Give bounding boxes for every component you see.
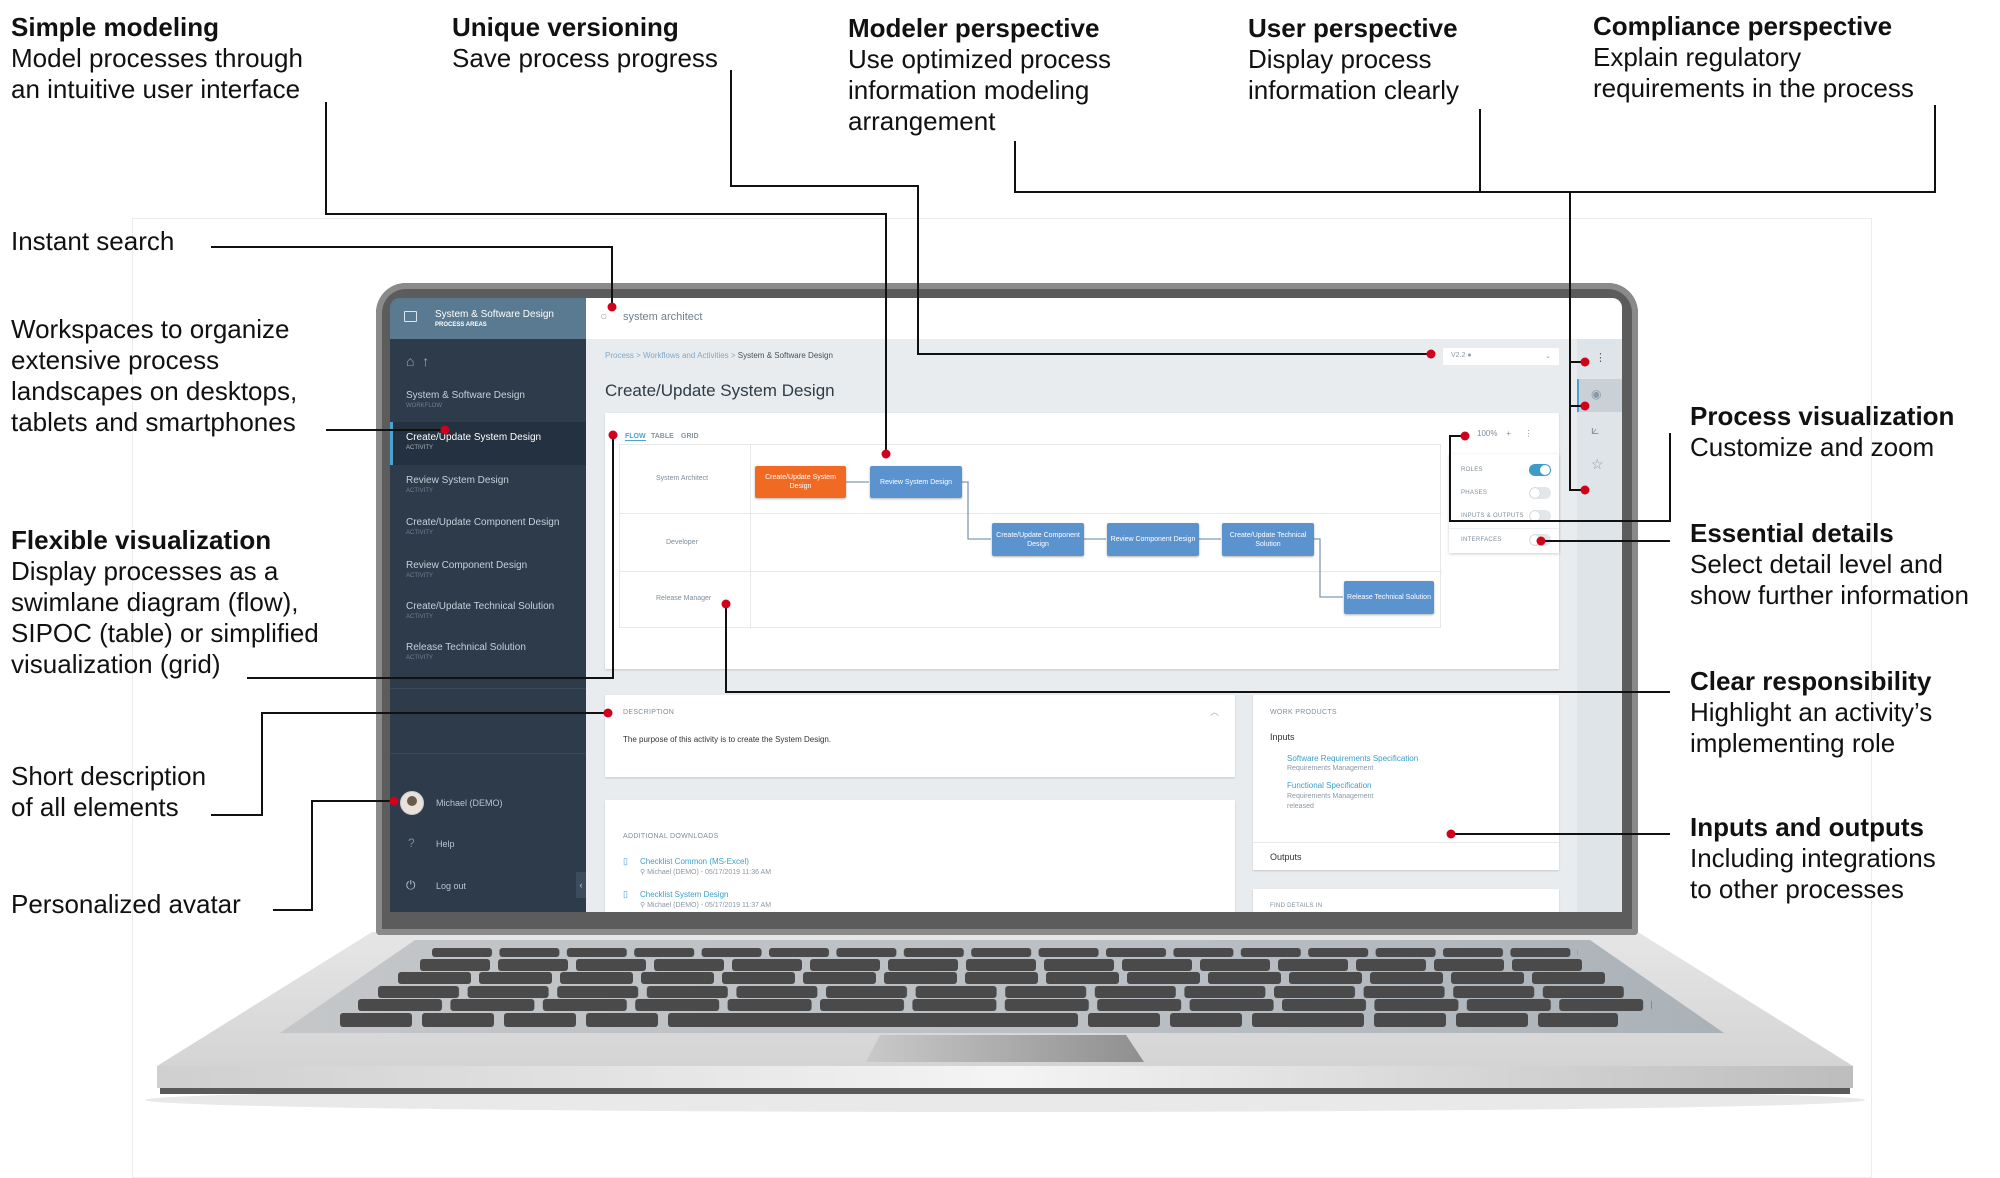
work products card: Software Requirements Specification [1287, 754, 1418, 763]
label: simple modeling: Simple modeling [11, 12, 219, 42]
version select: ⌄ [1545, 353, 1551, 360]
page title: Create/Update System Design [605, 381, 835, 400]
search bar: ○ [600, 309, 607, 323]
breadcrumb: Process > Workflows and Activities > System & Software Design [605, 351, 833, 360]
sidebar [390, 298, 586, 912]
sidebar: WORKFLOW [406, 403, 442, 409]
label: flexible visualization: Flexible visualization [11, 525, 271, 555]
right icon bar: ⟀ [1591, 421, 1599, 437]
sidebar: Create/Update System Design [406, 432, 541, 443]
label: unique versioning [452, 12, 718, 73]
sidebar: Release Technical Solution [406, 642, 526, 653]
label: essential details [1690, 518, 1969, 610]
swimlanes [619, 444, 1441, 628]
label: modeler perspective: Modeler perspective [848, 13, 1099, 43]
label: simple modeling [11, 12, 303, 104]
label: clear responsibility: implementing role [1690, 728, 1895, 758]
label: workspaces: landscapes on desktops, [11, 376, 297, 406]
label: essential details: Essential details [1690, 518, 1894, 548]
label: inputs and outputs: Including integrations [1690, 843, 1936, 873]
screen [390, 298, 1622, 912]
flow card: 100% + ⋮ [1477, 429, 1532, 438]
right icon bar: ⋮ [1595, 352, 1606, 364]
sidebar: ⏻ [406, 878, 416, 892]
label: process visualization [1690, 401, 1954, 462]
search bar: system architect [623, 311, 702, 323]
search bar [586, 298, 1622, 339]
description card [605, 695, 1235, 777]
downloads card: ADDITIONAL DOWNLOADS [623, 833, 719, 840]
sidebar: Create/Update Component Design [406, 517, 559, 528]
flow card: Design [790, 483, 811, 490]
label: essential details: show further information [1690, 580, 1969, 610]
downloads card: ⚲ Michael (DEMO) - 05/17/2019 11:36 AM [640, 869, 771, 876]
description card: DESCRIPTION [623, 709, 674, 716]
label: modeler perspective: information modeling [848, 75, 1089, 105]
label: user perspective: User perspective [1248, 13, 1458, 43]
label: essential details: Select detail level and [1690, 549, 1943, 579]
label: modeler perspective: Use optimized process [848, 44, 1111, 74]
work products card: Outputs [1270, 852, 1302, 862]
sidebar: ACTIVITY [406, 488, 433, 494]
label: process visualization: Customize and zoom [1690, 432, 1934, 462]
label: workspaces: tablets and smartphones [11, 407, 296, 437]
label: inputs and outputs: Inputs and outputs [1690, 812, 1924, 842]
flow card: Design [1027, 540, 1049, 548]
options panel: INTERFACES [1461, 537, 1502, 543]
downloads card: ▯ [623, 889, 628, 899]
label: simple modeling: Model processes through [11, 43, 303, 73]
flow card: Create/Update System [765, 474, 836, 481]
flow card: Review Component Design [1111, 536, 1195, 543]
label: flexible visualization: visualization (grid) [11, 649, 221, 679]
label: flexible visualization: Display processes as a [11, 556, 278, 586]
flow card: TABLE [651, 433, 674, 440]
sidebar: Review Component Design [406, 560, 527, 571]
downloads card: ⚲ Michael (DEMO) - 05/17/2019 11:37 AM [640, 902, 771, 909]
description card: ︿ [1210, 707, 1219, 717]
laptop screen bezel [376, 283, 1638, 935]
label: compliance perspective [1593, 11, 1914, 103]
work products card: Requirements Management [1287, 765, 1373, 772]
right icon bar [1577, 339, 1622, 912]
label: unique versioning: Unique versioning [452, 12, 679, 42]
label: flexible visualization [11, 525, 319, 679]
work products card: Requirements Management [1287, 793, 1373, 800]
flow card [605, 413, 1559, 669]
sidebar: ? [408, 836, 415, 850]
flow card: FLOW [625, 433, 646, 440]
downloads card [605, 800, 1235, 912]
options panel [1449, 454, 1559, 553]
label: process visualization: Process visualization [1690, 401, 1954, 431]
flow card: Create/Update Technical [1230, 532, 1306, 538]
label: workspaces [11, 314, 297, 437]
label: clear responsibility: Clear responsibility [1690, 666, 1931, 696]
sidebar: Log out [436, 881, 466, 891]
sidebar: Review System Design [406, 475, 509, 486]
sidebar: ACTIVITY [406, 573, 433, 579]
work products card: Inputs [1270, 732, 1295, 742]
label: compliance perspective: Explain regulatory [1593, 42, 1801, 72]
sidebar: Michael (DEMO) [436, 798, 503, 808]
label: modeler perspective [848, 13, 1111, 136]
label: clear responsibility [1690, 666, 1932, 758]
label: simple modeling: an intuitive user interface [11, 74, 300, 104]
label: inputs and outputs: to other processes [1690, 874, 1904, 904]
label: user perspective [1248, 13, 1459, 105]
description card: The purpose of this activity is to create the System Design. [623, 735, 831, 744]
sidebar: ACTIVITY [406, 530, 433, 536]
flow card: Create/Update Component [996, 532, 1080, 538]
label: modeler perspective: arrangement [848, 106, 995, 136]
downloads card: Checklist System Design [640, 890, 728, 899]
version select: V2.2 ● [1451, 352, 1472, 359]
options panel: ROLES [1461, 467, 1483, 473]
flow card: Solution [1255, 540, 1281, 548]
sidebar: System & Software Design [406, 390, 525, 401]
screen: FIND DETAILS IN [1270, 903, 1322, 909]
label: user perspective: information clearly [1248, 75, 1459, 105]
work products card: released [1287, 803, 1314, 810]
label: inputs and outputs [1690, 812, 1936, 904]
label: flexible visualization: SIPOC (table) or simplified [11, 618, 319, 648]
sidebar: ACTIVITY [406, 614, 433, 620]
label: short description: of all elements [11, 792, 179, 822]
work products card [1253, 695, 1559, 870]
downloads card: ▯ [623, 856, 628, 866]
flow card: Release Technical Solution [1347, 594, 1431, 601]
label: workspaces: Workspaces to organize [11, 314, 289, 344]
sidebar: ⌂ ↑ [406, 353, 429, 369]
label: compliance perspective: Compliance perspective [1593, 11, 1892, 41]
downloads card: Checklist Common (MS-Excel) [640, 857, 749, 866]
swimlanes: Release Manager [656, 595, 711, 602]
sidebar: PROCESS AREAS [435, 322, 487, 328]
flow card: GRID [681, 433, 698, 440]
label: personalized avatar: Personalized avatar [11, 889, 241, 919]
label: instant search: Instant search [11, 226, 174, 256]
sidebar: ACTIVITY [406, 655, 433, 661]
version select [1443, 348, 1559, 365]
label: unique versioning: Save process progress [452, 43, 718, 73]
sidebar: Create/Update Technical Solution [406, 601, 554, 612]
label: short description [11, 761, 206, 822]
swimlanes: Developer [666, 539, 698, 546]
label: user perspective: Display process [1248, 44, 1432, 74]
right icon bar: ☆ [1591, 456, 1604, 472]
flow arrows [846, 481, 1343, 598]
options panel: INPUTS & OUTPUTS [1461, 513, 1524, 519]
flow card: Review System Design [880, 478, 952, 486]
label: clear responsibility: Highlight an activity’s [1690, 697, 1932, 727]
sidebar: ‹ [580, 880, 582, 890]
right icon bar: ◉ [1591, 387, 1601, 401]
sidebar: ACTIVITY [406, 445, 433, 451]
sidebar: System & Software Design [435, 309, 554, 320]
label: compliance perspective: requirements in the process [1593, 73, 1914, 103]
options panel: PHASES [1461, 490, 1487, 496]
swimlanes: System Architect [656, 475, 708, 482]
work products card: WORK PRODUCTS [1270, 709, 1337, 716]
label: short description: Short description [11, 761, 206, 791]
background frame [132, 218, 1872, 1178]
label: flexible visualization: swimlane diagram (flow), [11, 587, 299, 617]
label: workspaces: extensive process [11, 345, 219, 375]
work products card: Functional Specification [1287, 781, 1372, 790]
sidebar: Help [436, 839, 455, 849]
